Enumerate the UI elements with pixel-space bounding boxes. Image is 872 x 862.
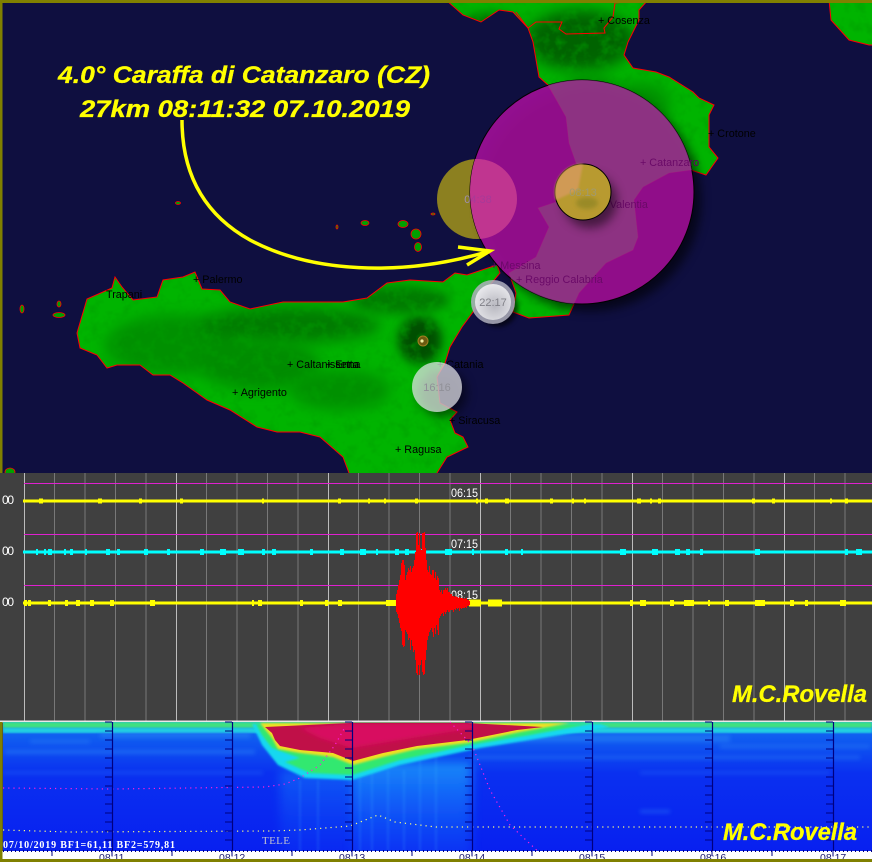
circle: 04:38 olive event: 04:38 bbox=[464, 194, 492, 206]
trace labels: 00 bbox=[2, 544, 14, 558]
energy halo bbox=[252, 724, 610, 780]
icon: Etna volcano marker bbox=[418, 336, 428, 346]
small islands bbox=[5, 202, 435, 476]
city labels: + Agrigento bbox=[232, 387, 287, 399]
trace labels: 00 bbox=[2, 595, 14, 609]
city labels: + Reggio Calabria bbox=[516, 274, 603, 286]
city labels: + Palermo bbox=[193, 274, 243, 286]
city labels: + Messina bbox=[491, 260, 541, 272]
city labels: + Siracusa bbox=[449, 415, 500, 427]
city labels bbox=[106, 15, 756, 456]
circle: large purple event: 04:38 bbox=[464, 194, 492, 206]
panel: seismogram bbox=[0, 473, 872, 722]
magenta dotted trace bbox=[3, 722, 545, 858]
circle: 04:38 olive event bbox=[437, 159, 517, 239]
TELE label: TELE bbox=[262, 835, 290, 847]
spectrogram caption: 07/10/2019 BF1=61,11 BF2=579,81 bbox=[3, 840, 175, 851]
watermark: M.C.Rovella: M.C.Rovella bbox=[723, 819, 857, 846]
circle: 22:17 white event: 22:17 bbox=[479, 297, 507, 309]
top band bbox=[3, 722, 872, 728]
time axis lines bbox=[105, 722, 834, 851]
circle: large purple event: + Vibo Valentia bbox=[576, 199, 648, 211]
city labels: + Cosenza bbox=[598, 15, 650, 27]
circle: large purple event: + Messina bbox=[491, 260, 541, 272]
panel: spectrogram bbox=[0, 720, 872, 862]
city labels: + Catania bbox=[437, 359, 484, 371]
coastline bbox=[77, 0, 872, 473]
energy core bbox=[265, 723, 543, 761]
city labels: Trapani bbox=[106, 289, 142, 301]
city labels: + Caltanissetta bbox=[287, 359, 359, 371]
title: 27km 08:11:32 07.10.2019 bbox=[79, 96, 411, 123]
circle: large purple event: + Reggio Calabria bbox=[516, 274, 603, 286]
trace labels bbox=[2, 486, 478, 609]
panel: map bbox=[0, 0, 872, 476]
yellow dotted trace bbox=[3, 815, 872, 832]
plume bbox=[280, 770, 355, 860]
trace: 08:15 yellow with red earthquake burst: 08:15 bbox=[451, 588, 478, 602]
city labels: + Catanzaro bbox=[640, 157, 699, 169]
circle: large purple event: + Catanzaro bbox=[640, 157, 699, 169]
trace labels: 07:15 bbox=[451, 537, 478, 551]
circle: 16:16 white event bbox=[412, 362, 467, 417]
city labels: + Crotone bbox=[708, 128, 756, 140]
circle shadow: large purple event bbox=[479, 89, 701, 311]
circle: 08:13 small event bbox=[555, 164, 617, 228]
title: 4.0° Caraffa di Catanzaro (CZ) bbox=[57, 62, 430, 89]
trace: 08:15 yellow with red earthquake burst bbox=[23, 532, 872, 675]
title bbox=[57, 62, 430, 123]
trace: 06:15 yellow bbox=[23, 500, 872, 502]
circle: 22:17 white event bbox=[471, 280, 518, 327]
watermark: M.C.Rovella: M.C.Rovella bbox=[732, 681, 867, 708]
circle: 16:16 white event: 16:16 bbox=[423, 382, 451, 394]
land: Sicily, Calabria and Puglia bbox=[0, 0, 872, 476]
arrow bbox=[182, 120, 490, 268]
circle: large purple event bbox=[470, 80, 699, 304]
city labels: + Ragusa bbox=[395, 444, 442, 456]
trace labels: 06:15 bbox=[451, 486, 478, 500]
city labels: + Enna bbox=[326, 359, 361, 371]
streaks bbox=[3, 733, 870, 813]
city labels: + Vibo Valentia bbox=[576, 199, 648, 211]
trace labels: 00 bbox=[2, 493, 14, 507]
time ruler bbox=[0, 851, 872, 862]
trace: 07:15 cyan bbox=[23, 550, 872, 554]
circle: 08:13 small event: 08:13 bbox=[569, 187, 597, 199]
